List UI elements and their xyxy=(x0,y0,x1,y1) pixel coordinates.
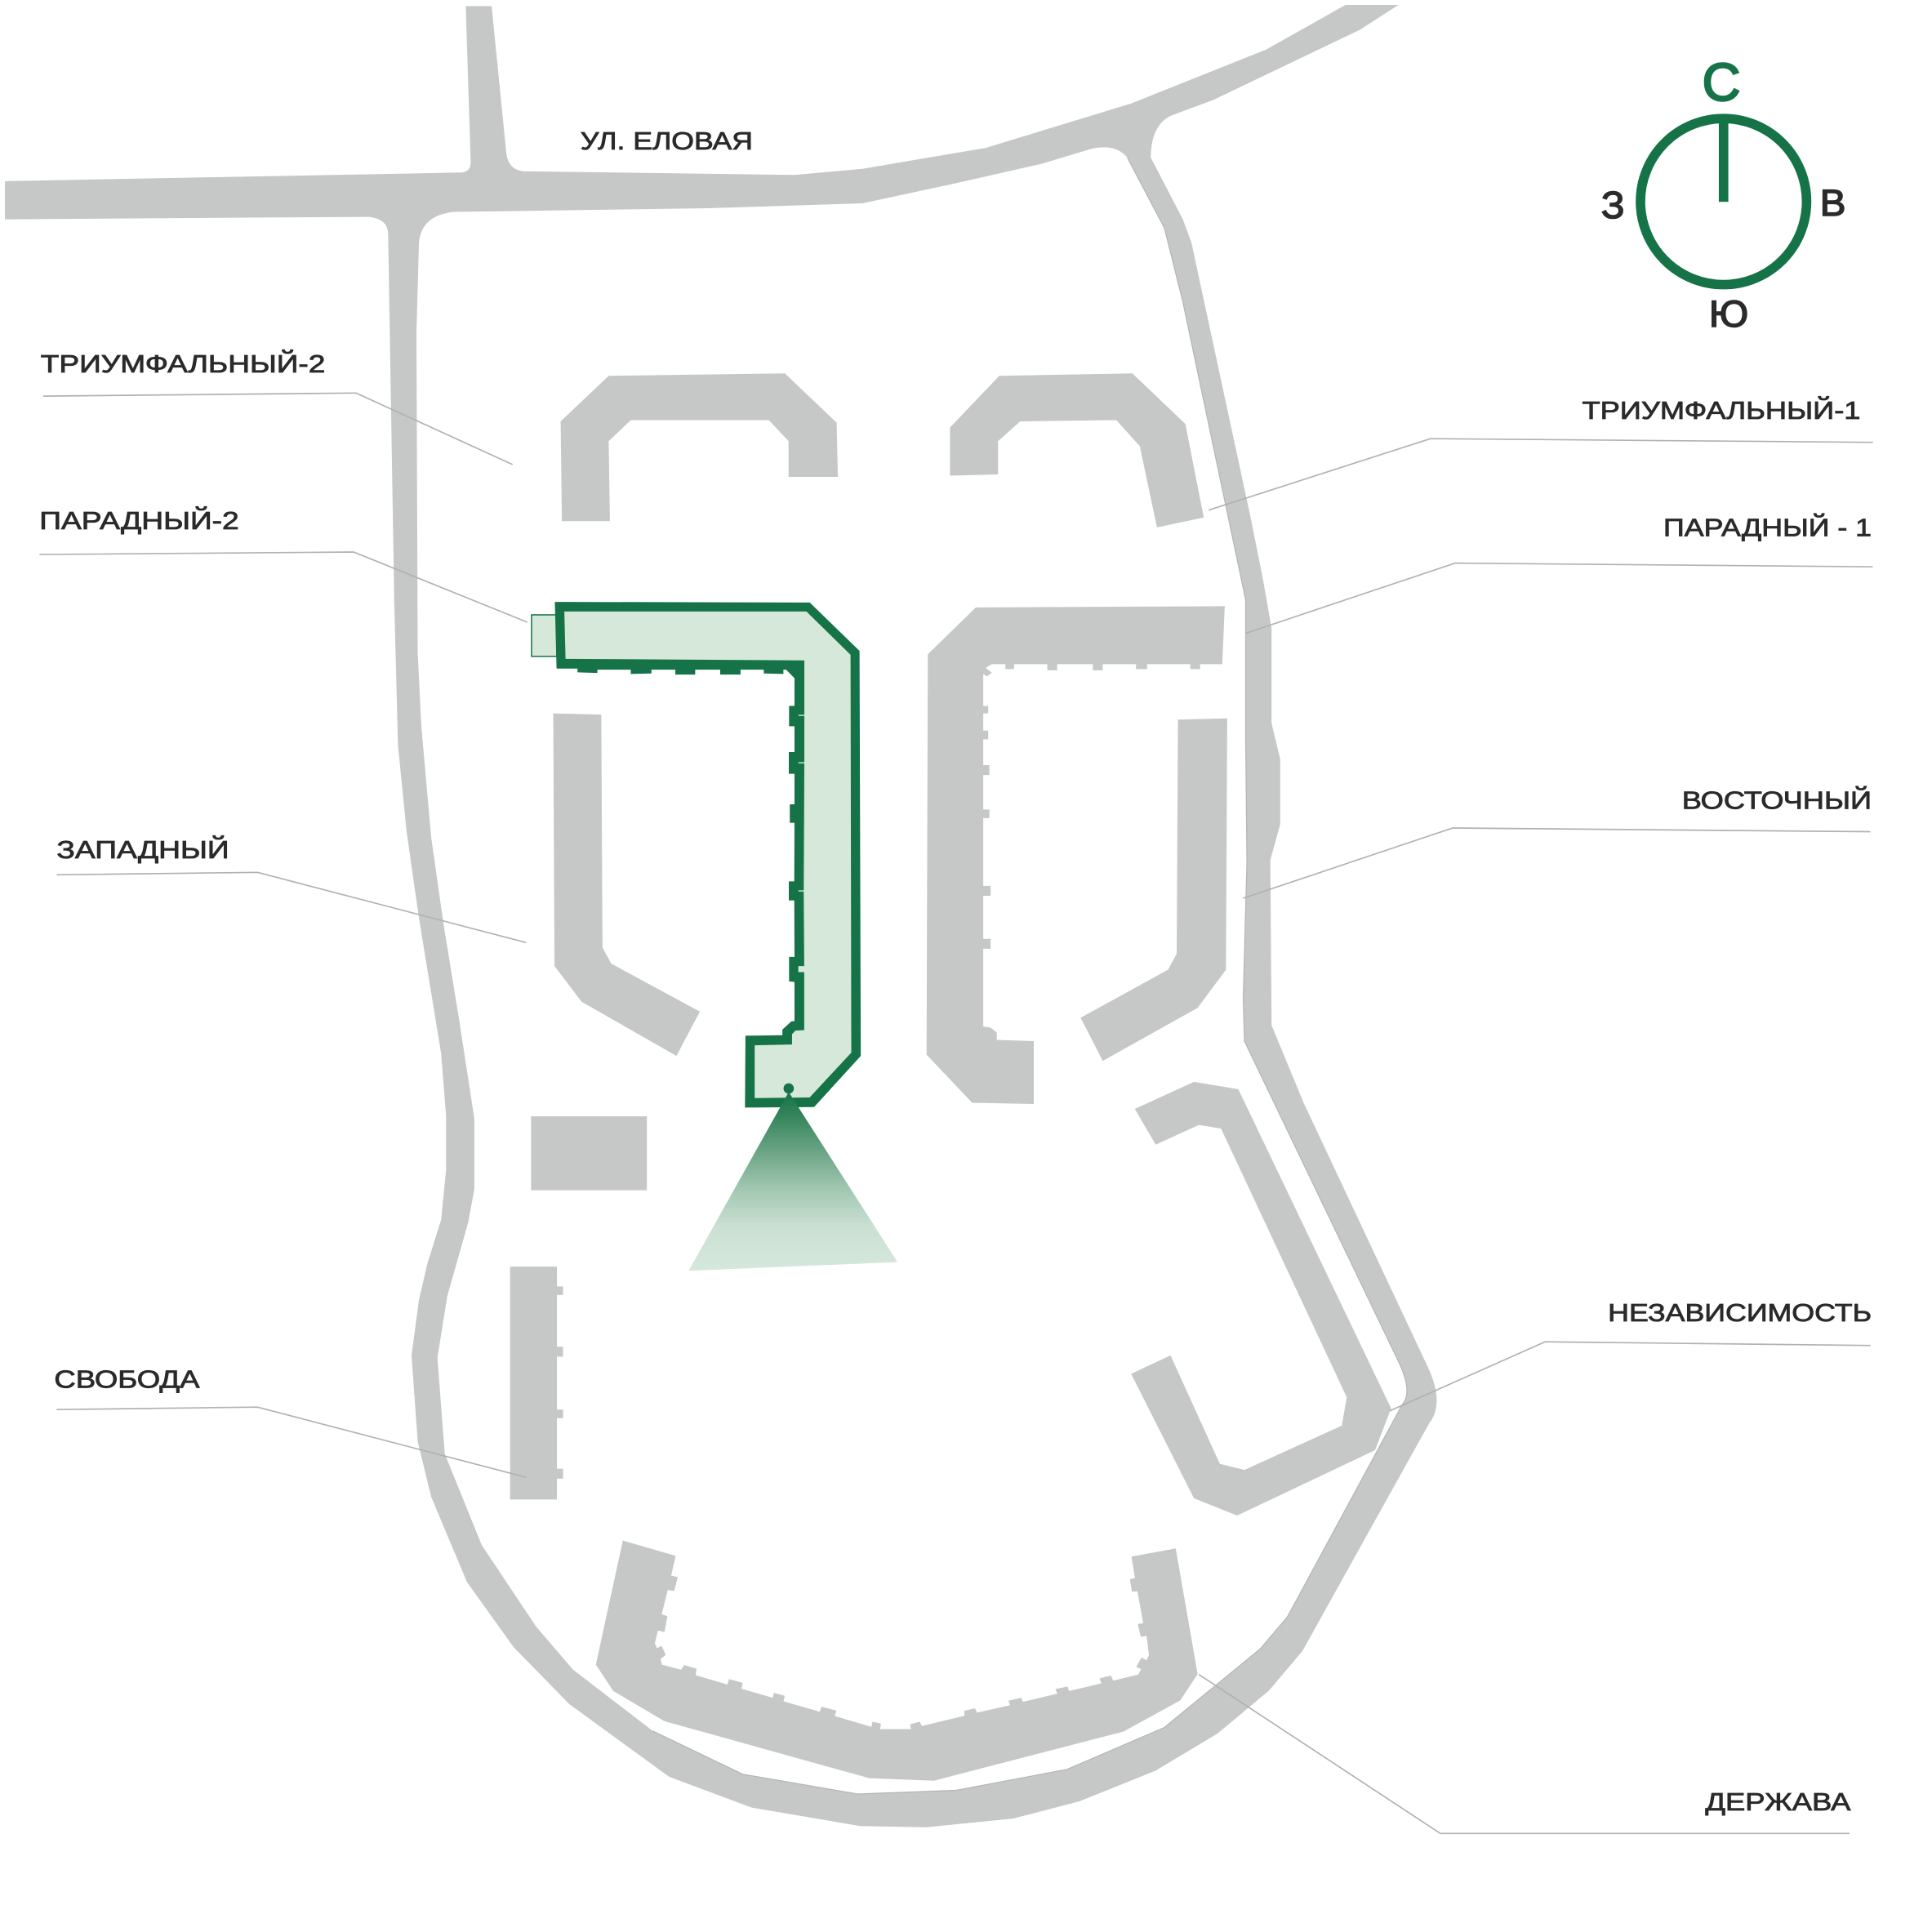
viewpoint dot xyxy=(784,1084,794,1093)
building: Парадный-1 xyxy=(927,606,1225,1104)
north needle xyxy=(1719,121,1729,202)
south letter: Ю xyxy=(1709,293,1748,335)
north letter: С xyxy=(1703,52,1740,112)
building: Триумфальный-1 xyxy=(950,373,1204,528)
building outline xyxy=(554,602,861,1107)
street label: УЛ. ЕЛОВАЯ xyxy=(581,127,753,155)
label: Восточный: ВОСТОЧНЫЙ xyxy=(1682,785,1872,814)
building fill xyxy=(564,612,852,1098)
label: Независимость: НЕЗАВИСИМОСТЬ xyxy=(1608,1298,1872,1327)
highlighted building: Парадный-2 xyxy=(532,602,861,1107)
leader lines xyxy=(39,393,1873,1833)
label: Триумфальный-1: ТРИУМФАЛЬНЫЙ-1 xyxy=(1582,395,1860,425)
label: Парадный - 1: ПАРАДНЫЙ - 1 xyxy=(1663,513,1872,542)
view cone xyxy=(688,1092,897,1271)
building: Независимость xyxy=(1131,1082,1391,1516)
label: Западный: ЗАПАДНЫЙ xyxy=(56,835,229,864)
compass xyxy=(1601,52,1845,335)
compass ring xyxy=(1640,118,1806,285)
label: Триумфальный-2: ТРИУМФАЛЬНЫЙ-2 xyxy=(41,349,325,378)
west letter: З xyxy=(1601,184,1625,226)
building: Западный xyxy=(554,714,700,1056)
label: Держава: ДЕРЖАВА xyxy=(1705,1787,1851,1816)
street inner edge line xyxy=(653,158,1407,1794)
east letter: В xyxy=(1820,182,1845,224)
annex xyxy=(532,615,557,657)
roads: street and ring road xyxy=(5,5,1436,1827)
label: Свобода: СВОБОДА xyxy=(54,1365,200,1394)
building: rectangular block xyxy=(531,1116,647,1191)
building: Свобода xyxy=(510,1266,563,1499)
label: Парадный-2: ПАРАДНЫЙ-2 xyxy=(39,505,239,535)
building: Восточный xyxy=(1080,719,1227,1061)
building: Триумфальный-2 xyxy=(561,373,838,521)
building: Держава xyxy=(596,1541,1198,1781)
